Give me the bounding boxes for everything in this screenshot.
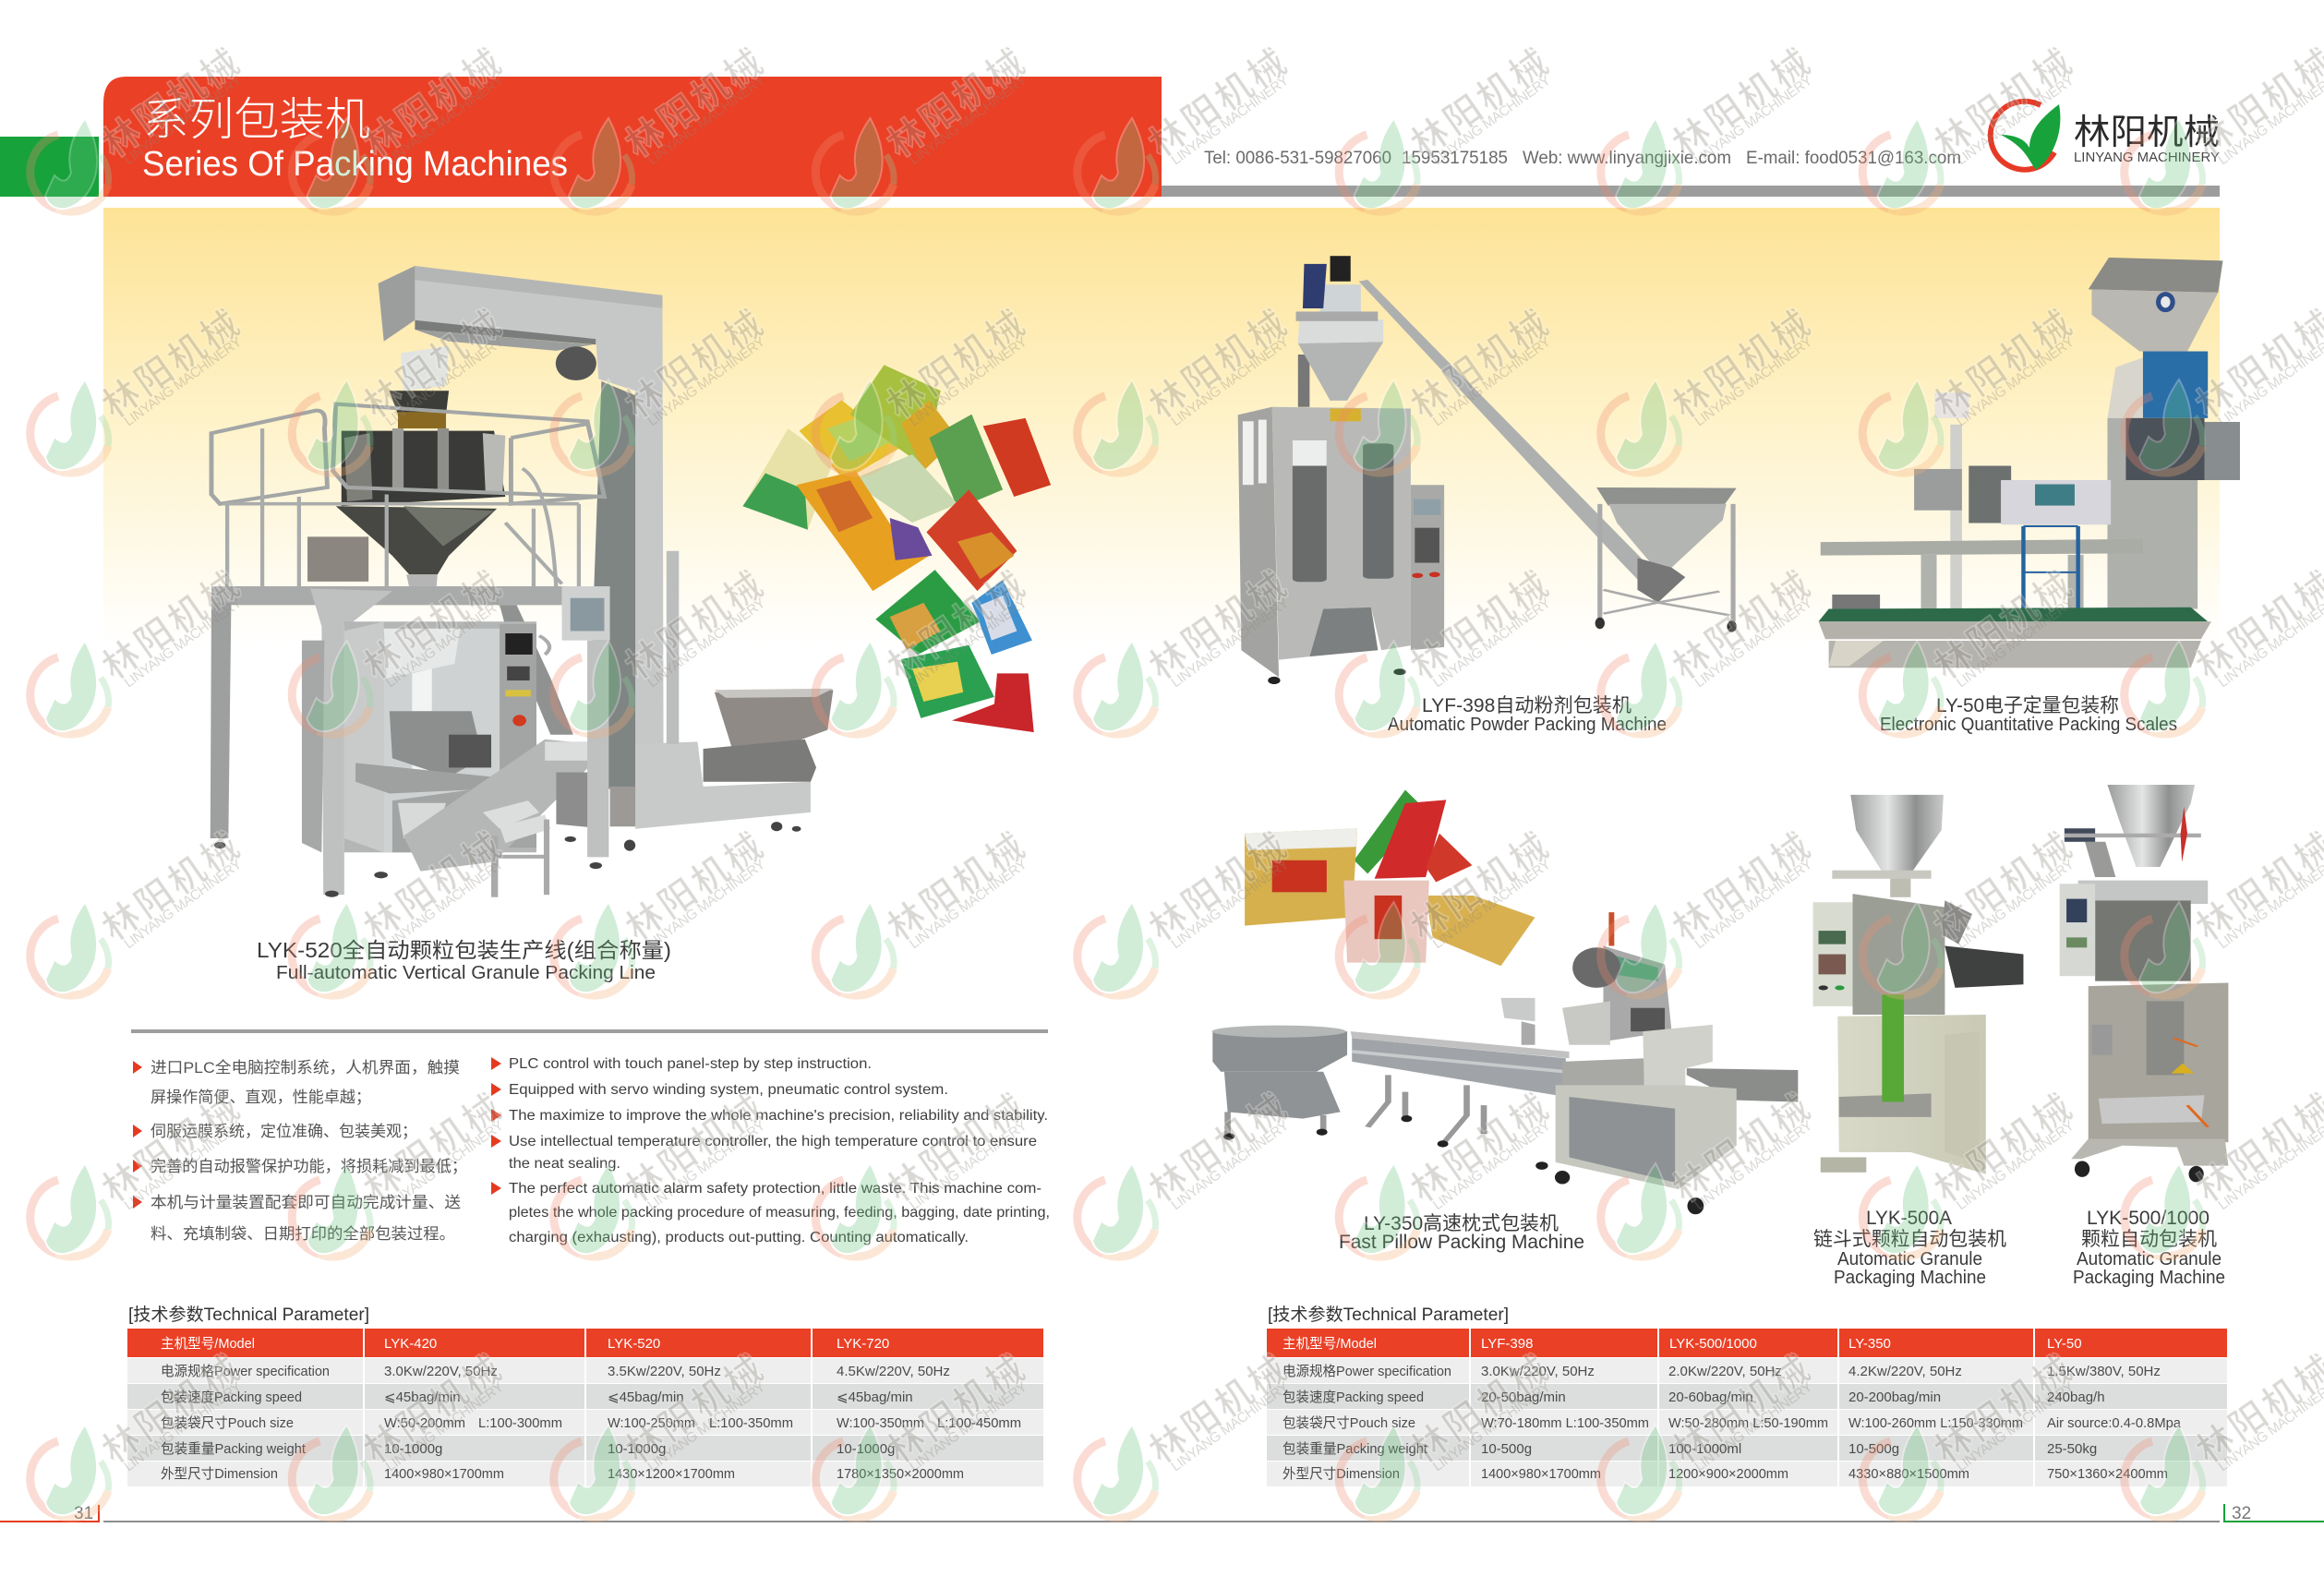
watermark grid: LINYANG MACHINERY (121, 857, 245, 952)
watermark grid: 林阳机械 (1142, 565, 1294, 688)
watermark grid: 林阳机械 (1142, 1349, 1294, 1472)
watermark grid: LINYANG MACHINERY (383, 596, 507, 691)
technical table left: W:100-350mm (837, 1415, 924, 1431)
watermark grid: LINYANG MACHINERY (1430, 73, 1554, 168)
features divider (131, 1029, 1048, 1033)
technical table left: LYK-720 (837, 1336, 889, 1352)
title chinese: 系列包装机 (143, 95, 370, 145)
watermark grid: 林阳机械 (1927, 42, 2079, 165)
technical table left: LYK-520 (608, 1336, 660, 1352)
technical table left: 3.0Kw/220V, 50Hz (384, 1364, 498, 1379)
watermark grid: 林阳机械 (619, 1088, 770, 1210)
watermark grid: LINYANG MACHINERY (907, 596, 1030, 691)
caption: LY-350: LY-350高速枕式包装机 (1364, 1213, 1559, 1234)
technical table right: 3.0Kw/220V, 50Hz (1481, 1364, 1595, 1379)
header right: contact line: 15953175185 (1402, 149, 1508, 168)
title english: Series Of Packing Machines (142, 145, 568, 184)
technical table right: 20-60bag/min (1668, 1390, 1753, 1405)
watermark grid: LINYANG MACHINERY (907, 73, 1030, 168)
feature list chinese (133, 1059, 467, 1243)
header grey rule (1162, 186, 2220, 197)
watermark grid: 林阳机械 (619, 1349, 770, 1472)
watermark grid: 林阳机械 (880, 565, 1032, 688)
watermark grid: 林阳机械 (1403, 42, 1556, 165)
technical table left: 10-1000g (384, 1441, 442, 1457)
watermark grid: LINYANG MACHINERY (1430, 1118, 1554, 1213)
watermark grid: LINYANG MACHINERY (383, 73, 507, 168)
green tab (0, 137, 99, 197)
watermark grid: LINYANG MACHINERY (644, 334, 768, 429)
watermark grid: 林阳机械 (1927, 1349, 2079, 1472)
watermark grid: LINYANG MACHINERY (1430, 334, 1554, 429)
technical table left: 包装袋尺寸Pouch size (161, 1415, 294, 1431)
watermark grid: LINYANG MACHINERY (1430, 1379, 1554, 1474)
feature list chinese: 进口PLC全电脑控制系统，人机界面，触摸 (151, 1059, 460, 1077)
background gradient panel (103, 208, 2220, 646)
watermark grid: 林阳机械 (1403, 565, 1556, 688)
machine: LYF-398 powder packing (1238, 256, 1737, 684)
technical table left: 电源规格Power specification (161, 1364, 330, 1379)
caption: LYK-500/1000: Packaging Machine (2073, 1268, 2225, 1288)
watermark grid: 林阳机械 (1666, 1349, 1817, 1472)
feature list chinese: 本机与计量装置配套即可自动完成计量、送 (151, 1194, 461, 1211)
technical table right: 25-50kg (2047, 1441, 2097, 1457)
watermark grid: LINYANG MACHINERY (1168, 334, 1292, 429)
watermark grid: 林阳机械 (880, 1088, 1032, 1210)
header right: contact line: Web: www.linyangjixie.com (1523, 149, 1731, 168)
technical table left: 包装重量Packing weight (161, 1441, 307, 1457)
technical table left: 1780×1350×2000mm (837, 1466, 964, 1482)
caption: LYK-500A: Packaging Machine (1834, 1268, 1986, 1288)
watermark grid: 林阳机械 (619, 42, 770, 165)
watermark grid: LINYANG MACHINERY (1168, 596, 1292, 691)
feature list english (491, 1056, 1050, 1245)
header right: contact line: E-mail: food0531@163.com (1746, 149, 1961, 168)
feature list english: The maximize to improve the whole machine's precision, reliability and stability. (509, 1108, 1048, 1124)
watermark grid: 林阳机械 (356, 826, 509, 949)
feature list chinese: 屏操作简便、直观，性能卓越； (151, 1089, 371, 1106)
watermark grid: 林阳机械 (95, 565, 247, 688)
caption: LY-50: Electronic Quantitative Packing Scales (1880, 715, 2177, 735)
table heading left: [技术参数Technical Parameter] (128, 1305, 369, 1325)
caption: LY-350: Fast Pillow Packing Machine (1339, 1232, 1584, 1253)
table heading right: [技术参数Technical Parameter] (1268, 1305, 1509, 1325)
technical table left: 10-1000g (608, 1441, 666, 1457)
watermark grid: 林阳机械 (619, 826, 770, 949)
watermark grid: 林阳机械 (619, 304, 770, 427)
watermark grid: LINYANG MACHINERY (383, 1118, 507, 1213)
watermark grid: LINYANG MACHINERY (121, 73, 245, 168)
watermark grid: LINYANG MACHINERY (1168, 857, 1292, 952)
technical table left: LYK-420 (384, 1336, 437, 1352)
watermark grid: LINYANG MACHINERY (644, 857, 768, 952)
watermark grid: 林阳机械 (356, 1088, 509, 1210)
watermark grid: LINYANG MACHINERY (1692, 596, 1815, 691)
watermark grid: 林阳机械 (880, 304, 1032, 427)
technical table right: 240bag/h (2047, 1390, 2105, 1405)
caption: LYK-520 (257, 938, 671, 983)
caption: LY-350 (1339, 1213, 1584, 1253)
watermark grid: LINYANG MACHINERY (1168, 1118, 1292, 1213)
watermark grid: 林阳机械 (356, 42, 509, 165)
company logo: LINYANG MACHINERY (2074, 150, 2220, 165)
watermark grid: LINYANG MACHINERY (121, 334, 245, 429)
technical table right: LY-50 (2047, 1336, 2082, 1352)
machine: LYK-500A chain bucket packing (1813, 795, 2023, 1174)
watermark grid: 林阳机械 (1403, 826, 1556, 949)
technical table right: LY-350 (1848, 1336, 1891, 1352)
technical table right: LYF-398 (1481, 1336, 1533, 1352)
watermark grid: 林阳机械 (356, 304, 509, 427)
header left: title banner (0, 77, 1162, 197)
watermark grid: LINYANG MACHINERY (121, 596, 245, 691)
footer page 32: 32 (2232, 1504, 2251, 1523)
technical table left: 3.5Kw/220V, 50Hz (608, 1364, 721, 1379)
caption: LYK-500/1000: 颗粒自动包装机 (2081, 1229, 2217, 1250)
feature list chinese: 完善的自动报警保护功能，将损耗减到最低； (151, 1158, 467, 1175)
watermark grid: 林阳机械 (95, 1088, 247, 1210)
watermark grid: LINYANG MACHINERY (1954, 857, 2077, 952)
machine: LYK-500/1000 granule packing (2060, 785, 2228, 1182)
feature list english: charging (exhausting), products out-putting. Counting automatically. (509, 1230, 969, 1245)
watermark grid: LINYANG MACHINERY (1430, 596, 1554, 691)
watermark grid: LINYANG MACHINERY (1692, 73, 1815, 168)
snack bags cluster (742, 365, 1051, 732)
caption: LY-50 (1880, 695, 2177, 735)
watermark grid: 林阳机械 (1403, 304, 1556, 427)
watermark grid: 林阳机械 (1403, 1088, 1556, 1210)
watermark grid: 林阳机械 (1666, 42, 1817, 165)
technical table left: 包装速度Packing speed (161, 1390, 302, 1405)
technical table left: L:100-450mm (937, 1415, 1021, 1431)
caption: LYF-398: Automatic Powder Packing Machine (1388, 715, 1667, 735)
watermark grid: 林阳机械 (1927, 826, 2079, 949)
technical table left: 1400×980×1700mm (384, 1466, 504, 1482)
watermark grid: 林阳机械 (356, 1349, 509, 1472)
technical table right: 1.5Kw/380V, 50Hz (2047, 1364, 2161, 1379)
technical table right: 包装重量Packing weight (1282, 1441, 1428, 1457)
technical table left: 1430×1200×1700mm (608, 1466, 735, 1482)
technical table right: W:70-180mm L:100-350mm (1481, 1415, 1649, 1431)
watermark grid: LINYANG MACHINERY (907, 1118, 1030, 1213)
watermark grid: LINYANG MACHINERY (1954, 73, 2077, 168)
caption: LYF-398 (1388, 695, 1667, 735)
technical table left: W:100-250mm (608, 1415, 695, 1431)
watermark grid: LINYANG MACHINERY (383, 857, 507, 952)
caption: LYK-500A: LYK-500A (1866, 1208, 1952, 1229)
watermark grid: LINYANG MACHINERY (644, 1379, 768, 1474)
watermark grid: 林阳机械 (1142, 1088, 1294, 1210)
technical table right: 主机型号/Model (1282, 1336, 1377, 1352)
watermark grid: LINYANG MACHINERY (644, 596, 768, 691)
watermark grid: LINYANG MACHINERY (121, 1118, 245, 1213)
watermark grid: 林阳机械 (1927, 1088, 2079, 1210)
technical table left: 10-1000g (837, 1441, 895, 1457)
feature list english: the neat sealing. (509, 1156, 620, 1172)
technical table left: ⩽45bag/min (837, 1390, 913, 1405)
feature list english: Equipped with servo winding system, pneumatic control system. (509, 1082, 948, 1098)
technical table right: 100-1000ml (1668, 1441, 1741, 1457)
watermark grid: 林阳机械 (1403, 1349, 1556, 1472)
caption: LYK-520: LYK-520全自动颗粒包装生产线(组合称量) (257, 938, 671, 962)
packaged biscuit products (1245, 789, 1535, 966)
technical table right: 1400×980×1700mm (1481, 1466, 1601, 1482)
technical table left: ⩽45bag/min (384, 1390, 461, 1405)
watermark grid: LINYANG MACHINERY (907, 334, 1030, 429)
watermark grid: 林阳机械 (1142, 826, 1294, 949)
watermark grid: 林阳机械 (1666, 304, 1817, 427)
watermark grid: LINYANG MACHINERY (121, 1379, 245, 1474)
technical table right: 10-500g (1481, 1441, 1532, 1457)
technical table left: 4.5Kw/220V, 50Hz (837, 1364, 950, 1379)
watermark grid: LINYANG MACHINERY (1692, 857, 1815, 952)
watermark grid: LINYANG MACHINERY (1430, 857, 1554, 952)
company logo: 林阳机械 (2074, 114, 2220, 152)
watermark grid: LINYANG MACHINERY (1692, 1379, 1815, 1474)
technical table right (1267, 1329, 2227, 1486)
technical table right: 10-500g (1848, 1441, 1899, 1457)
caption: LYK-500A (1813, 1208, 2006, 1288)
red banner (103, 77, 1162, 197)
machine: LYK-520 granule packing line (211, 266, 1051, 897)
technical table right: 20-200bag/min (1848, 1390, 1941, 1405)
feature list chinese: 伺服运膜系统，定位准确、包装美观； (151, 1123, 417, 1140)
technical table right: 2.0Kw/220V, 50Hz (1668, 1364, 1782, 1379)
technical table right: 包装袋尺寸Pouch size (1282, 1415, 1415, 1431)
technical table right: 1200×900×2000mm (1668, 1466, 1788, 1482)
technical table left: L:100-350mm (709, 1415, 793, 1431)
caption: LYF-398: LYF-398自动粉剂包装机 (1422, 695, 1632, 716)
technical table left: ⩽45bag/min (608, 1390, 684, 1405)
technical table left: 主机型号/Model (161, 1336, 255, 1352)
watermark grid: 林阳机械 (1927, 304, 2079, 427)
feature list chinese: 料、充填制袋、日期打印的全部包装过程。 (151, 1225, 455, 1243)
watermark grid: LINYANG MACHINERY (1692, 334, 1815, 429)
watermark grid: LINYANG MACHINERY (644, 73, 768, 168)
technical table right: 20-50bag/min (1481, 1390, 1566, 1405)
watermark grid: LINYANG MACHINERY (907, 1379, 1030, 1474)
feature list english: Use intellectual temperature controller, the high temperature control to ensure (509, 1134, 1037, 1149)
watermark grid: 林阳机械 (1666, 826, 1817, 949)
technical table right: 包装速度Packing speed (1282, 1390, 1424, 1405)
watermark grid: 林阳机械 (619, 565, 770, 688)
technical table right: 4330×880×1500mm (1848, 1466, 1969, 1482)
footer page 32 (2223, 1504, 2324, 1523)
watermark grid: 林阳机械 (1666, 1088, 1817, 1210)
watermark grid: LINYANG MACHINERY (1168, 1379, 1292, 1474)
watermark grid: 林阳机械 (880, 826, 1032, 949)
watermark grid: LINYANG MACHINERY (907, 857, 1030, 952)
feature list english: The perfect automatic alarm safety protection, little waste. This machine com- (509, 1181, 1042, 1197)
technical table right: 电源规格Power specification (1282, 1364, 1451, 1379)
technical table left: W:50-200mm (384, 1415, 465, 1431)
watermark grid: 林阳机械 (356, 565, 509, 688)
watermark grid: 林阳机械 (880, 1349, 1032, 1472)
header right: contact line: Tel: 0086-531-59827060 (1204, 149, 1391, 168)
technical table right: Air source:0.4-0.8Mpa (2047, 1415, 2182, 1431)
watermark grid: LINYANG MACHINERY (1954, 334, 2077, 429)
caption: LYK-520: Full-automatic Vertical Granule Packing Line (276, 963, 656, 983)
watermark grid: 林阳机械 (1142, 42, 1294, 165)
technical table right: 外型尺寸Dimension (1282, 1466, 1400, 1482)
caption: LYK-500A: Automatic Granule (1837, 1249, 1982, 1269)
footer page 31: 31 (74, 1504, 93, 1523)
machine: LY-50 quantitative scales (1819, 258, 2240, 668)
technical table right: LYK-500/1000 (1669, 1336, 1757, 1352)
watermark grid: LINYANG MACHINERY (383, 334, 507, 429)
watermark grid: 林阳机械 (95, 826, 247, 949)
watermark grid: 林阳机械 (95, 304, 247, 427)
watermark grid: 林阳机械 (95, 42, 247, 165)
watermark grid: 林阳机械 (95, 1349, 247, 1472)
technical table right: W:50-280mm L:50-190mm (1668, 1415, 1828, 1431)
watermark grid: LINYANG MACHINERY (1954, 1379, 2077, 1474)
caption: LYK-500/1000: LYK-500/1000 (2087, 1208, 2210, 1229)
technical table left: L:100-300mm (478, 1415, 562, 1431)
watermark grid: 林阳机械 (1927, 565, 2079, 688)
watermark grid: 林阳机械 (1142, 304, 1294, 427)
technical table right: 750×1360×2400mm (2047, 1466, 2168, 1482)
caption: LY-50: LY-50电子定量包装称 (1936, 695, 2119, 716)
watermark grid: LINYANG MACHINERY (1692, 1118, 1815, 1213)
watermark grid: LINYANG MACHINERY (1954, 596, 2077, 691)
caption: LYK-500/1000 (2073, 1208, 2225, 1288)
caption: LYK-500/1000: Automatic Granule (2077, 1249, 2222, 1269)
caption: LYK-500A: 链斗式颗粒自动包装机 (1813, 1229, 2006, 1250)
technical table right: W:100-260mm L:150-330mm (1848, 1415, 2023, 1431)
company logo (1991, 102, 2220, 170)
technical table left: 外型尺寸Dimension (161, 1466, 278, 1482)
watermark grid: 林阳机械 (1666, 565, 1817, 688)
watermark grid: LINYANG MACHINERY (1168, 73, 1292, 168)
watermark grid: LINYANG MACHINERY (1954, 1118, 2077, 1213)
feature list english: PLC control with touch panel-step by step instruction. (509, 1056, 872, 1072)
feature list english: pletes the whole packing procedure of measuring, feeding, bagging, date printing, (509, 1205, 1050, 1221)
technical table left (127, 1329, 1043, 1486)
header right: contact line (1204, 149, 1961, 168)
technical table right: 4.2Kw/220V, 50Hz (1848, 1364, 1962, 1379)
watermark grid: 林阳机械 (880, 42, 1032, 165)
watermark grid: LINYANG MACHINERY (644, 1118, 768, 1213)
watermark grid: LINYANG MACHINERY (383, 1379, 507, 1474)
machine: LY-350 fast pillow packing (1212, 912, 1798, 1214)
